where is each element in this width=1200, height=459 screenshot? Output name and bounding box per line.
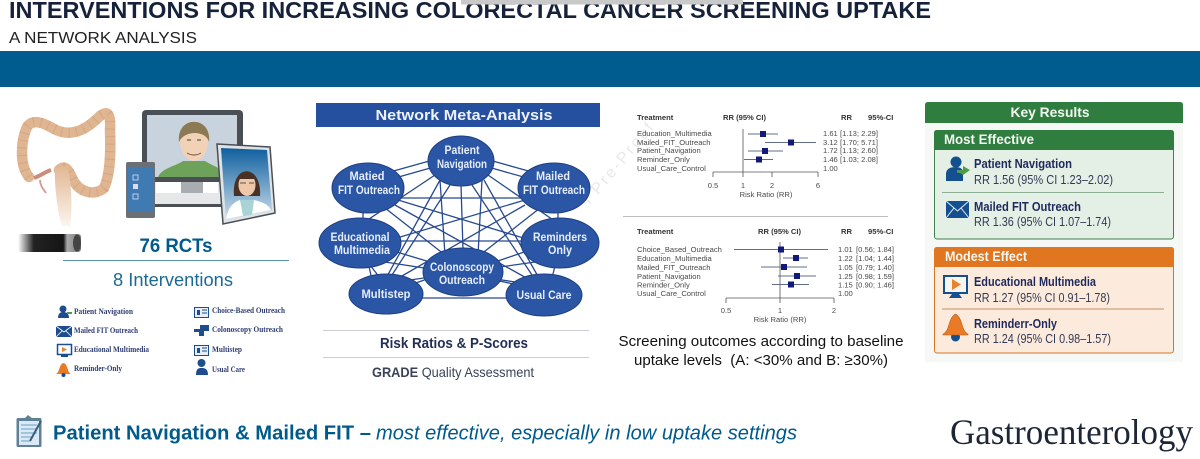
forest plot B: Choice_Based_Outreach bbox=[637, 245, 722, 254]
forest plot A: Reminder_Only bbox=[637, 155, 690, 164]
forest plot A: [1.13; 2.60] bbox=[840, 146, 878, 155]
legend item: Mailed FIT Outreach: Mailed FIT Outreach bbox=[74, 325, 138, 335]
result: Educational Multimedia: RR 1.27 (95% CI 0.91–1.78) bbox=[974, 291, 1110, 305]
forest plot B: Risk Ratio (RR) bbox=[754, 315, 807, 324]
node: Educational Multimedia: Multimedia bbox=[334, 245, 391, 257]
phone bbox=[126, 162, 155, 218]
panel: key results bbox=[925, 102, 1183, 362]
forest plot B: 1.15 bbox=[838, 280, 853, 290]
forest plot B: 1.25 bbox=[838, 272, 853, 281]
box: Modest Effect: Modest Effect bbox=[945, 249, 1027, 264]
result: Patient Navigation: RR 1.56 (95% CI 1.23–2.02) bbox=[974, 173, 1113, 187]
forest plot A: [1.70; 5.71] bbox=[840, 138, 878, 147]
box: Most Effective: Most Effective bbox=[944, 132, 1034, 147]
node: Matied FIT Outreach: Matied bbox=[350, 171, 384, 183]
icon: monitor bbox=[944, 276, 967, 298]
tablet bbox=[217, 144, 275, 224]
forest plot A bbox=[637, 113, 893, 199]
network diagram bbox=[319, 136, 599, 316]
journal logo: Gastroenterology bbox=[950, 412, 1193, 452]
forest plot B: 1.01 bbox=[838, 245, 853, 254]
legend item: Patient Navigation: Patient Navigation bbox=[74, 306, 133, 316]
result: Mailed FIT Outreach: RR 1.36 (95% CI 1.07–1.74) bbox=[974, 215, 1111, 229]
node: Matied FIT Outreach: FIT Outreach bbox=[338, 185, 400, 197]
node: Mailed FIT Outreach: Mailed bbox=[536, 171, 570, 183]
illustration: colon bbox=[22, 113, 110, 226]
forest plot B: 1 bbox=[778, 306, 782, 315]
legend item: Mailed FIT Outreach bbox=[56, 325, 138, 337]
result: Mailed FIT Outreach bbox=[974, 200, 1111, 229]
icon: bell bbox=[943, 314, 968, 342]
forest plot B: Mailed_FIT_Outreach bbox=[637, 263, 710, 272]
legend item: Patient Navigation bbox=[58, 306, 133, 318]
blue banner bbox=[0, 51, 1200, 87]
forest plot B: RR bbox=[841, 227, 852, 236]
forest plot B: [0.79; 1.40] bbox=[856, 263, 894, 272]
heading: Network Meta-Analysis bbox=[316, 103, 600, 127]
caption: screening outcomes: uptake levels (A: <30% and B: ≥30%) bbox=[634, 352, 888, 369]
forest plot B: [1.04; 1.44] bbox=[856, 254, 894, 263]
legend item: Reminder-Only bbox=[56, 363, 123, 377]
legend item: Colonoscopy Outreach bbox=[194, 324, 283, 336]
forest plot B: Usual_Care_Control bbox=[637, 289, 706, 298]
forest plot B: Treatment bbox=[637, 227, 674, 236]
node: Patient Navigation: Patient bbox=[444, 145, 480, 157]
forest plot A: Usual_Care_Control bbox=[637, 164, 706, 173]
subtitle: A NETWORK ANALYSIS bbox=[9, 30, 197, 47]
forest plot A: [1.13; 2.29] bbox=[840, 129, 878, 138]
forest plot B: Reminder_Only bbox=[637, 280, 690, 290]
forest plot B: Education_Multimedia bbox=[637, 254, 712, 263]
label: GRADE Quality Assessment: GRADE Quality Assessment bbox=[372, 364, 534, 380]
result: Patient Navigation: Patient Navigation bbox=[974, 157, 1072, 171]
forest plot A: 1.46 bbox=[823, 155, 838, 164]
forest plot B: [0.90; 1.46] bbox=[856, 280, 894, 290]
forest plot A: RR (95% CI) bbox=[723, 113, 767, 122]
node: Multistep: Multistep bbox=[362, 289, 410, 301]
forest plot B: [0.98; 1.59] bbox=[856, 272, 894, 281]
illustration: video consultation devices bbox=[126, 110, 275, 224]
result: Patient Navigation bbox=[974, 157, 1113, 187]
panel: forest plots bbox=[618, 113, 904, 369]
forest plot A: 1.00 bbox=[823, 164, 838, 173]
heading: Key Results bbox=[925, 102, 1183, 123]
heading: Network Meta-Analysis: Network Meta-Analysis bbox=[376, 107, 552, 124]
box: Most Effective bbox=[934, 130, 1174, 239]
forest plot A: 1 bbox=[741, 181, 745, 190]
node: Educational Multimedia: Educational bbox=[330, 232, 390, 244]
forest plot B: [0.56; 1.84] bbox=[856, 245, 894, 254]
icon: clipboard bbox=[16, 415, 42, 447]
legend item: Choice-Based Outreach: Choice-Based Outreach bbox=[212, 305, 285, 315]
box: Modest Effect bbox=[934, 247, 1174, 353]
faint watermark: l Pre-Proof bbox=[580, 120, 658, 208]
heading: Key Results: Key Results bbox=[1010, 104, 1090, 120]
forest plot B: 0.5 bbox=[721, 306, 731, 315]
result: Reminderr-Only bbox=[974, 317, 1111, 346]
legend item: Educational Multimedia bbox=[58, 344, 150, 357]
forest plot B: 1.00 bbox=[838, 289, 853, 298]
forest plot A: RR bbox=[841, 113, 852, 122]
legend item: Reminder-Only: Reminder-Only bbox=[74, 363, 123, 373]
forest plot B: 95%-CI bbox=[868, 227, 893, 236]
forest plot A: 3.12 bbox=[823, 138, 838, 147]
stat: 8 Interventions: 8 Interventions bbox=[113, 270, 233, 290]
forest plot B bbox=[637, 227, 894, 324]
panel: network meta-analysis bbox=[316, 103, 600, 380]
stat: 76 RCTs: 76 RCTs bbox=[140, 235, 213, 257]
takeaway message: Patient Navigation & Mailed FIT – most effective, especially in low uptake settings bbox=[53, 422, 797, 444]
forest plot B: 1.05 bbox=[838, 263, 853, 272]
forest plot B: 1.22 bbox=[838, 254, 853, 263]
forest plot A: Risk Ratio (RR) bbox=[740, 190, 793, 199]
result: Reminderr-Only: Reminderr-Only bbox=[974, 317, 1057, 331]
legend item: Usual Care: Usual Care bbox=[212, 364, 245, 374]
forest plot A: 0.5 bbox=[708, 181, 718, 190]
forest plot A: 6 bbox=[816, 181, 820, 190]
result: Educational Multimedia: Educational Multimedia bbox=[974, 275, 1097, 289]
result: Reminderr-Only: RR 1.24 (95% CI 0.98–1.57) bbox=[974, 332, 1111, 346]
legend item: Colonoscopy Outreach: Colonoscopy Outreach bbox=[212, 324, 283, 334]
forest plot A: Treatment bbox=[637, 113, 674, 122]
node: Patient Navigation: Navigation bbox=[437, 159, 487, 171]
forest plot A: 2 bbox=[770, 181, 774, 190]
node: Colonoscopy Outreach: Outreach bbox=[439, 275, 485, 287]
node: Reminders Only: Reminders bbox=[533, 232, 587, 244]
forest plot B: Patient_Navigation bbox=[637, 272, 701, 281]
result: Mailed FIT Outreach: Mailed FIT Outreach bbox=[974, 200, 1081, 214]
forest plot A: [1.03; 2.08] bbox=[840, 155, 878, 164]
legend item: Usual Care bbox=[196, 359, 245, 375]
result: Educational Multimedia bbox=[974, 275, 1110, 305]
forest plot A: Mailed_FIT_Outreach bbox=[637, 138, 710, 147]
legend item: Multistep: Multistep bbox=[212, 344, 242, 354]
forest plot A: 1.61 bbox=[823, 129, 838, 138]
node: Colonoscopy Outreach: Colonoscopy bbox=[430, 262, 495, 274]
node: Mailed FIT Outreach: FIT Outreach bbox=[523, 185, 585, 197]
forest plot A: Patient_Navigation bbox=[637, 146, 701, 155]
legend item: Multistep bbox=[194, 344, 242, 356]
forest plot B: RR (95% CI) bbox=[758, 227, 802, 236]
legend: interventions bbox=[56, 305, 285, 377]
panel: study overview bbox=[18, 110, 289, 377]
node: Reminders Only: Only bbox=[548, 245, 573, 257]
illustration: colonoscope tip bbox=[18, 234, 81, 252]
forest plot A: 1.72 bbox=[823, 146, 838, 155]
icon: envelope bbox=[946, 201, 969, 218]
legend item: Choice-Based Outreach bbox=[194, 305, 285, 318]
forest plot A: 95%-CI bbox=[868, 113, 893, 122]
forest plot B: 2 bbox=[832, 306, 836, 315]
node: Usual Care: Usual Care bbox=[516, 290, 572, 302]
caption: screening outcomes: Screening outcomes according to baseline bbox=[618, 333, 904, 350]
label: Risk Ratios and P-Scores: Risk Ratios & P-Scores bbox=[380, 336, 528, 352]
legend item: Educational Multimedia: Educational Multimedia bbox=[74, 344, 150, 354]
forest plot A: Education_Multimedia bbox=[637, 129, 712, 138]
icon: patient navigation bbox=[946, 156, 970, 181]
watermark strip bbox=[461, 0, 743, 4]
